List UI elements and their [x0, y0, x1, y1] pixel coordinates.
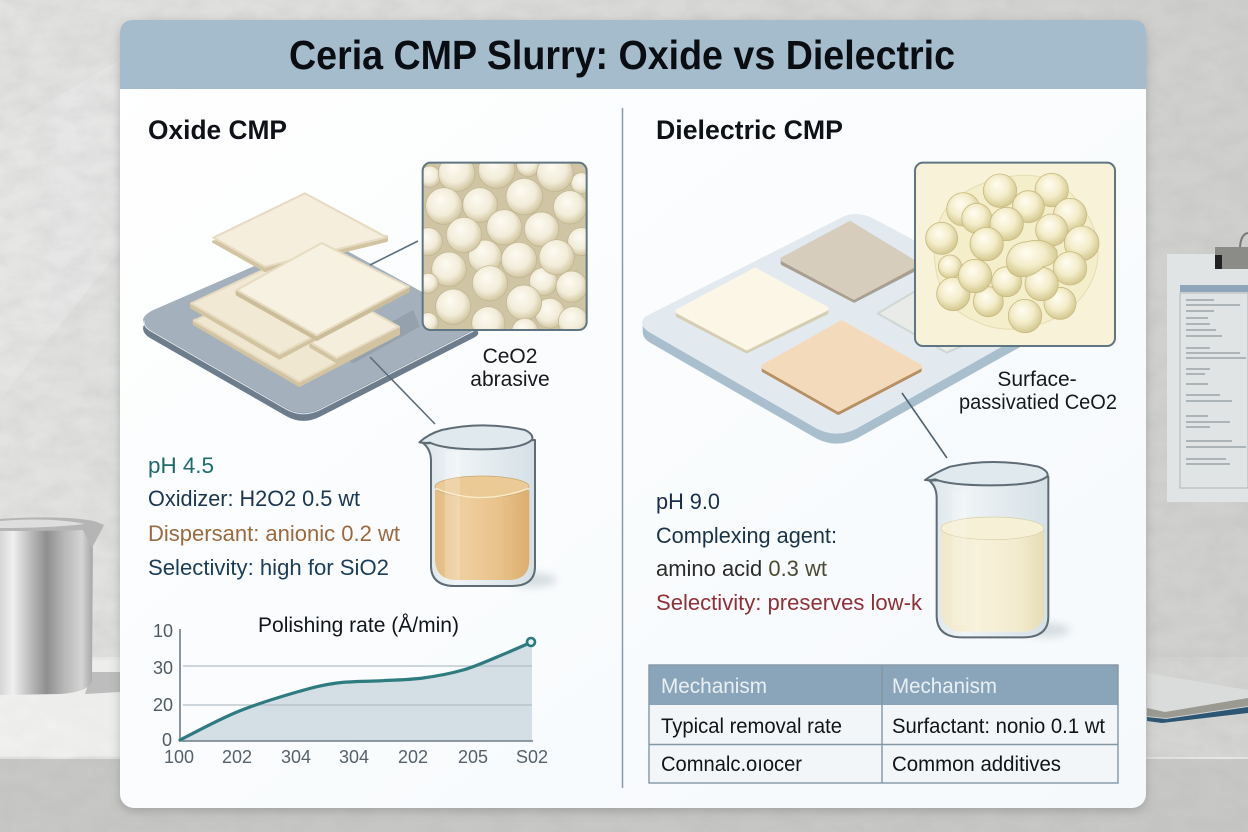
text block: oxide formulation: pH 4.5: [148, 453, 214, 478]
text block: dielectric formulation: Selectivity: preserves low-k: [656, 590, 923, 615]
table: mechanism and additives: Mechanism: [661, 675, 767, 698]
inset: CeO2 abrasive particles: [422, 162, 588, 331]
text block: dielectric formulation: pH 9.0: [656, 489, 720, 514]
label: surface-passivated CeO2: passivatied CeO2: [959, 391, 1117, 414]
x axis labels: [164, 747, 548, 767]
label: surface-passivated CeO2: [959, 368, 1117, 414]
table: mechanism and additives: Common additives: [892, 753, 1061, 776]
table header: [649, 665, 1118, 705]
x axis labels: 304: [281, 747, 311, 767]
table: mechanism and additives: Mechanism: [892, 675, 997, 698]
arrow: connector to beaker: [902, 393, 947, 458]
heading: oxide CMP: Oxide CMP: [148, 115, 287, 145]
icon: cream slurry beaker: [925, 462, 1070, 637]
heading: dielectric CMP: Dielectric CMP: [656, 115, 843, 145]
x axis labels: 304: [339, 747, 369, 767]
label: CeO2 abrasive: abrasive: [470, 368, 550, 391]
label: CeO2 abrasive: CeO2: [483, 345, 537, 368]
table: mechanism and additives: Surfactant: nonio 0.1 wt: [892, 715, 1105, 738]
background beaker: steel: [0, 517, 104, 695]
text block: dielectric formulation: Complexing agent:: [656, 523, 837, 548]
label: surface-passivated CeO2: Surface-: [997, 368, 1077, 391]
text block: oxide formulation: Selectivity: high for SiO2: [148, 555, 389, 580]
label: CeO2 abrasive: [470, 345, 550, 391]
data point marker: [527, 638, 535, 646]
y axis labels: 10: [153, 621, 173, 641]
x axis labels: 202: [398, 747, 428, 767]
text block: oxide formulation: Dispersant: anionic 0.2 wt: [148, 521, 400, 546]
icon: amber slurry beaker: [419, 425, 557, 587]
x axis labels: 202: [222, 747, 252, 767]
background notebook: [1147, 673, 1248, 723]
y axis labels: 20: [153, 695, 173, 715]
inset: surface-passivated CeO2 particles: [915, 163, 1115, 346]
table: mechanism and additives: [649, 665, 1118, 783]
table: mechanism and additives: Typical removal rate: [661, 715, 842, 738]
text block: dielectric formulation: [656, 489, 923, 615]
chart title: Polishing rate (Å/min): [258, 614, 459, 637]
illustration: dielectric pad with four tiles: [642, 214, 1048, 444]
x axis labels: 100: [164, 747, 194, 767]
arrow: connector to inset: [370, 241, 418, 265]
title banner: Ceria CMP Slurry: Oxide vs Dielectric: [289, 32, 955, 78]
x axis labels: 205: [458, 747, 488, 767]
title banner: [120, 20, 1146, 89]
y axis labels: [153, 621, 173, 750]
arrow: connector to beaker: [370, 357, 435, 424]
table: mechanism and additives: Comnalc.oıocer: [661, 753, 802, 776]
panel: oxide CMP: [143, 115, 596, 767]
text block: oxide formulation: Oxidizer: H2O2 0.5 wt: [148, 486, 360, 511]
background clipboard paper: [1167, 233, 1248, 502]
panel: dielectric CMP: [642, 115, 1118, 783]
y axis labels: 30: [153, 658, 173, 678]
illustration: oxide pad with stacked sheets: [143, 193, 478, 421]
main card: [120, 20, 1146, 808]
y axis labels: 0: [162, 730, 172, 750]
chart: polishing rate area: [153, 614, 548, 767]
x axis labels: S02: [516, 747, 548, 767]
text block: dielectric formulation: amino acid 0.3 wt: [656, 556, 827, 581]
text block: oxide formulation: [148, 453, 400, 580]
